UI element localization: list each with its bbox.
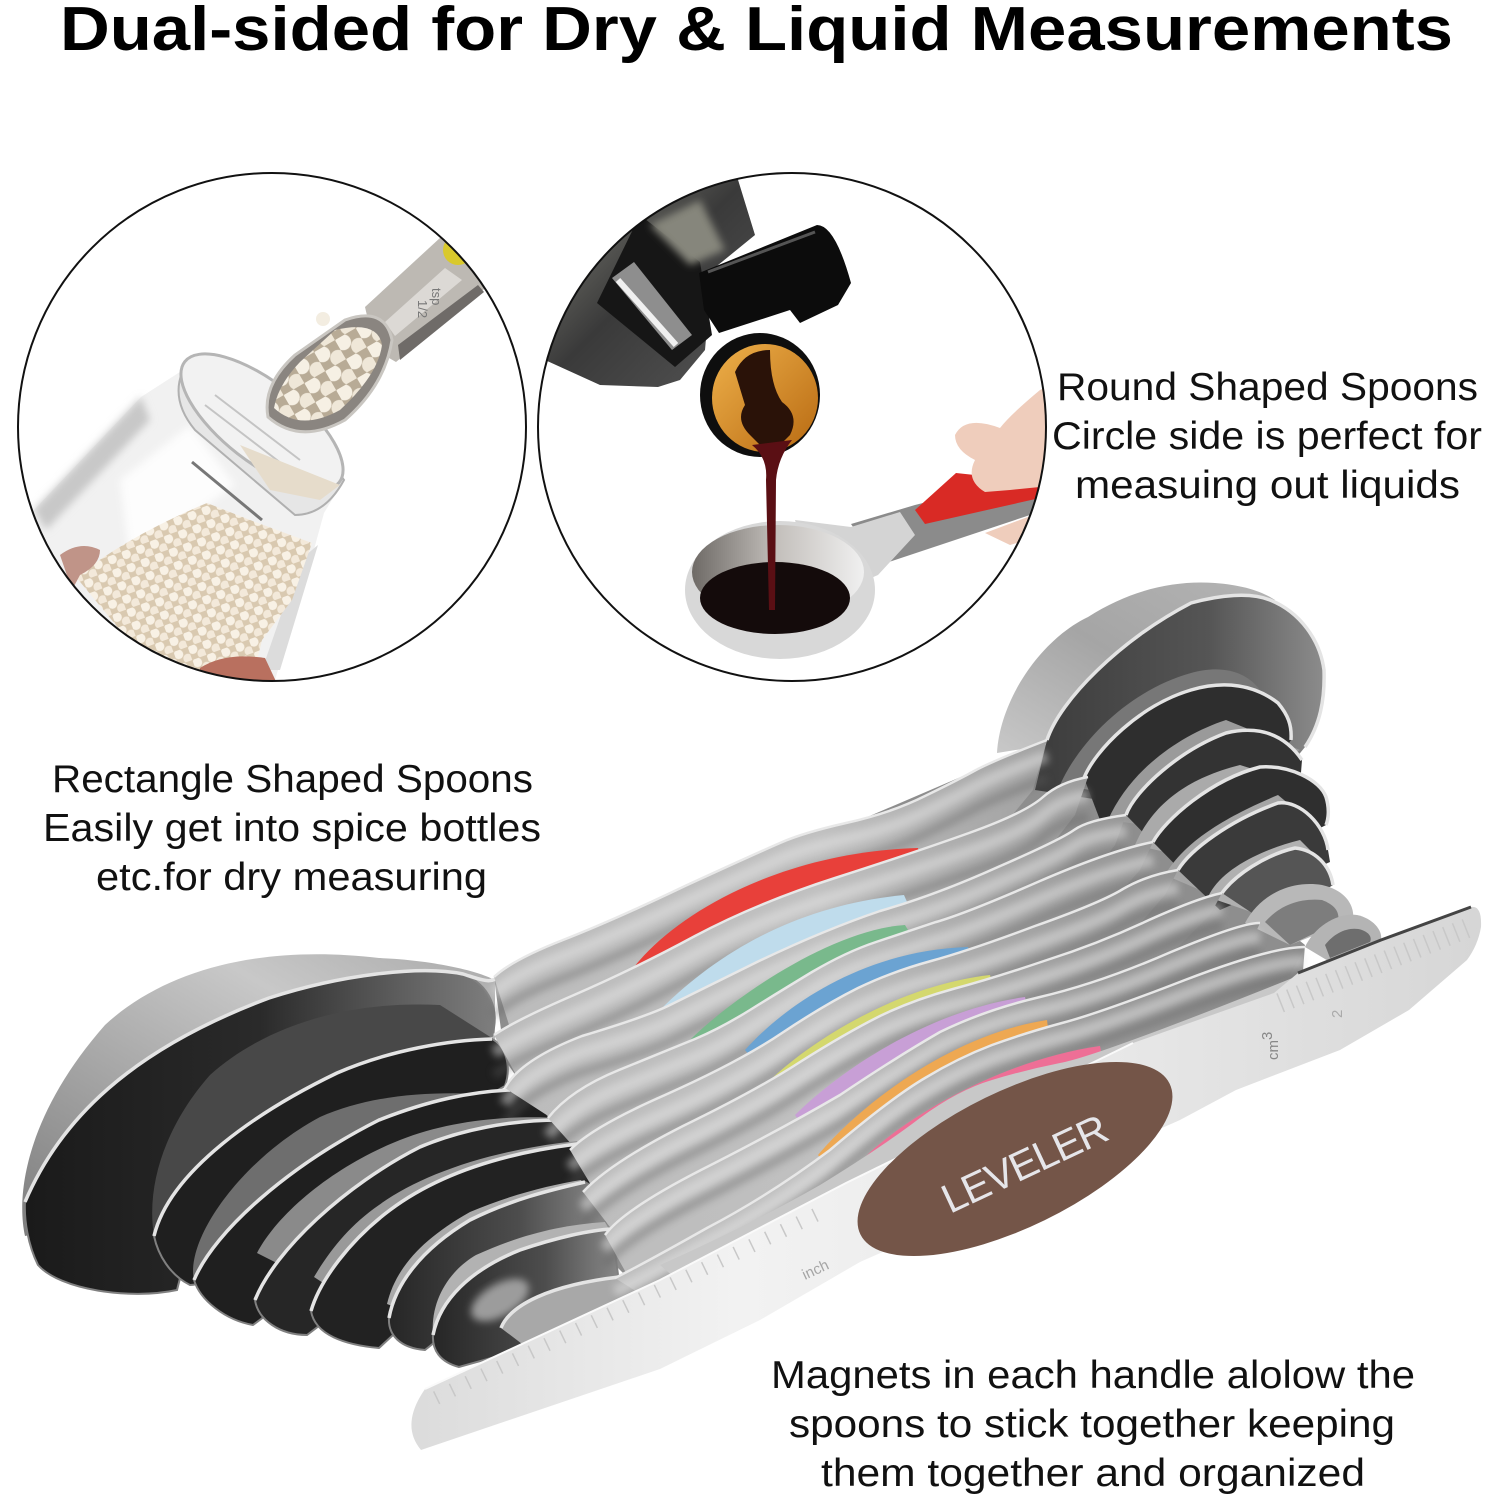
text block: magnets: Magnets in each handle alolow the (771, 1354, 1415, 1397)
icon: thumb (200, 656, 276, 680)
magnet: purple (795, 997, 1030, 1150)
text block: rectangle shaped spoons: Easily get into spice bottles (43, 807, 541, 850)
text block: round shaped spoons: measuing out liquids (1075, 464, 1460, 507)
text block: magnets: them together and organized (821, 1452, 1365, 1495)
magnet: orange (818, 1020, 1050, 1180)
spoon 6 (387, 840, 1333, 1350)
spoon 5 (311, 795, 1330, 1348)
text block: rectangle shaped spoons: etc.for dry measuring (96, 856, 487, 899)
photo circle: liquid spoon and bottle (538, 170, 1060, 681)
leveler bar: 2 (1329, 1010, 1346, 1018)
spoon 1 (22, 582, 1324, 1294)
leveler brand badge: LEVELER (934, 1105, 1115, 1222)
leveler bar: cm (1265, 1040, 1282, 1060)
magnet: yellow (765, 975, 995, 1120)
spoon 8 (501, 915, 1381, 1350)
magnet: red (628, 848, 925, 1010)
icon: measuring spoon (685, 468, 1060, 659)
lower handle edge (660, 975, 1300, 1300)
text block: round shaped spoons: Circle side is perfect for (1052, 415, 1482, 458)
leveler bar: 3 (1259, 1032, 1276, 1040)
icon: rectangle measuring spoon handle: tsp (429, 288, 444, 305)
spoon set illustration (22, 582, 1481, 1450)
photo circle: dry ingredient spoon and jar (18, 173, 526, 700)
spoon 2 (152, 669, 1291, 1285)
spoon 4 (255, 765, 1328, 1335)
icon: finger (60, 546, 100, 585)
icon: oil bottle (540, 170, 755, 387)
icon: rectangle measuring spoon handle: 1/2 (415, 300, 430, 318)
spoon 7 (433, 884, 1353, 1367)
text block: rectangle shaped spoons: Rectangle Shaped Spoons (52, 758, 533, 801)
text block: round shaped spoons (1052, 366, 1482, 507)
leveler bar: inch (800, 1257, 832, 1284)
text block: rectangle shaped spoons (43, 758, 541, 899)
spoon 3 (193, 720, 1302, 1325)
text block: round shaped spoons: Round Shaped Spoons (1057, 366, 1478, 409)
magnet: blue (745, 947, 975, 1080)
icon: liquid stream (752, 440, 792, 610)
icon: flip lid (699, 225, 851, 333)
text block: magnets (771, 1354, 1415, 1495)
icon: glass jar (32, 352, 346, 679)
icon: beads in jar (78, 503, 312, 670)
icon: rectangle measuring spoon handle (365, 238, 484, 362)
icon: spoon bowl with beads (267, 312, 392, 432)
icon: hand (955, 389, 1045, 545)
text block: magnets: spoons to stick together keeping (789, 1403, 1395, 1446)
leveler brand badge (831, 1022, 1199, 1296)
icon: bottle cap (700, 333, 820, 457)
handle backdrop (494, 740, 1305, 1300)
magnet: green (690, 925, 920, 1060)
leveler bar (411, 907, 1481, 1450)
magnet: pink (860, 1046, 1105, 1190)
magnet: light blue (660, 895, 915, 1040)
